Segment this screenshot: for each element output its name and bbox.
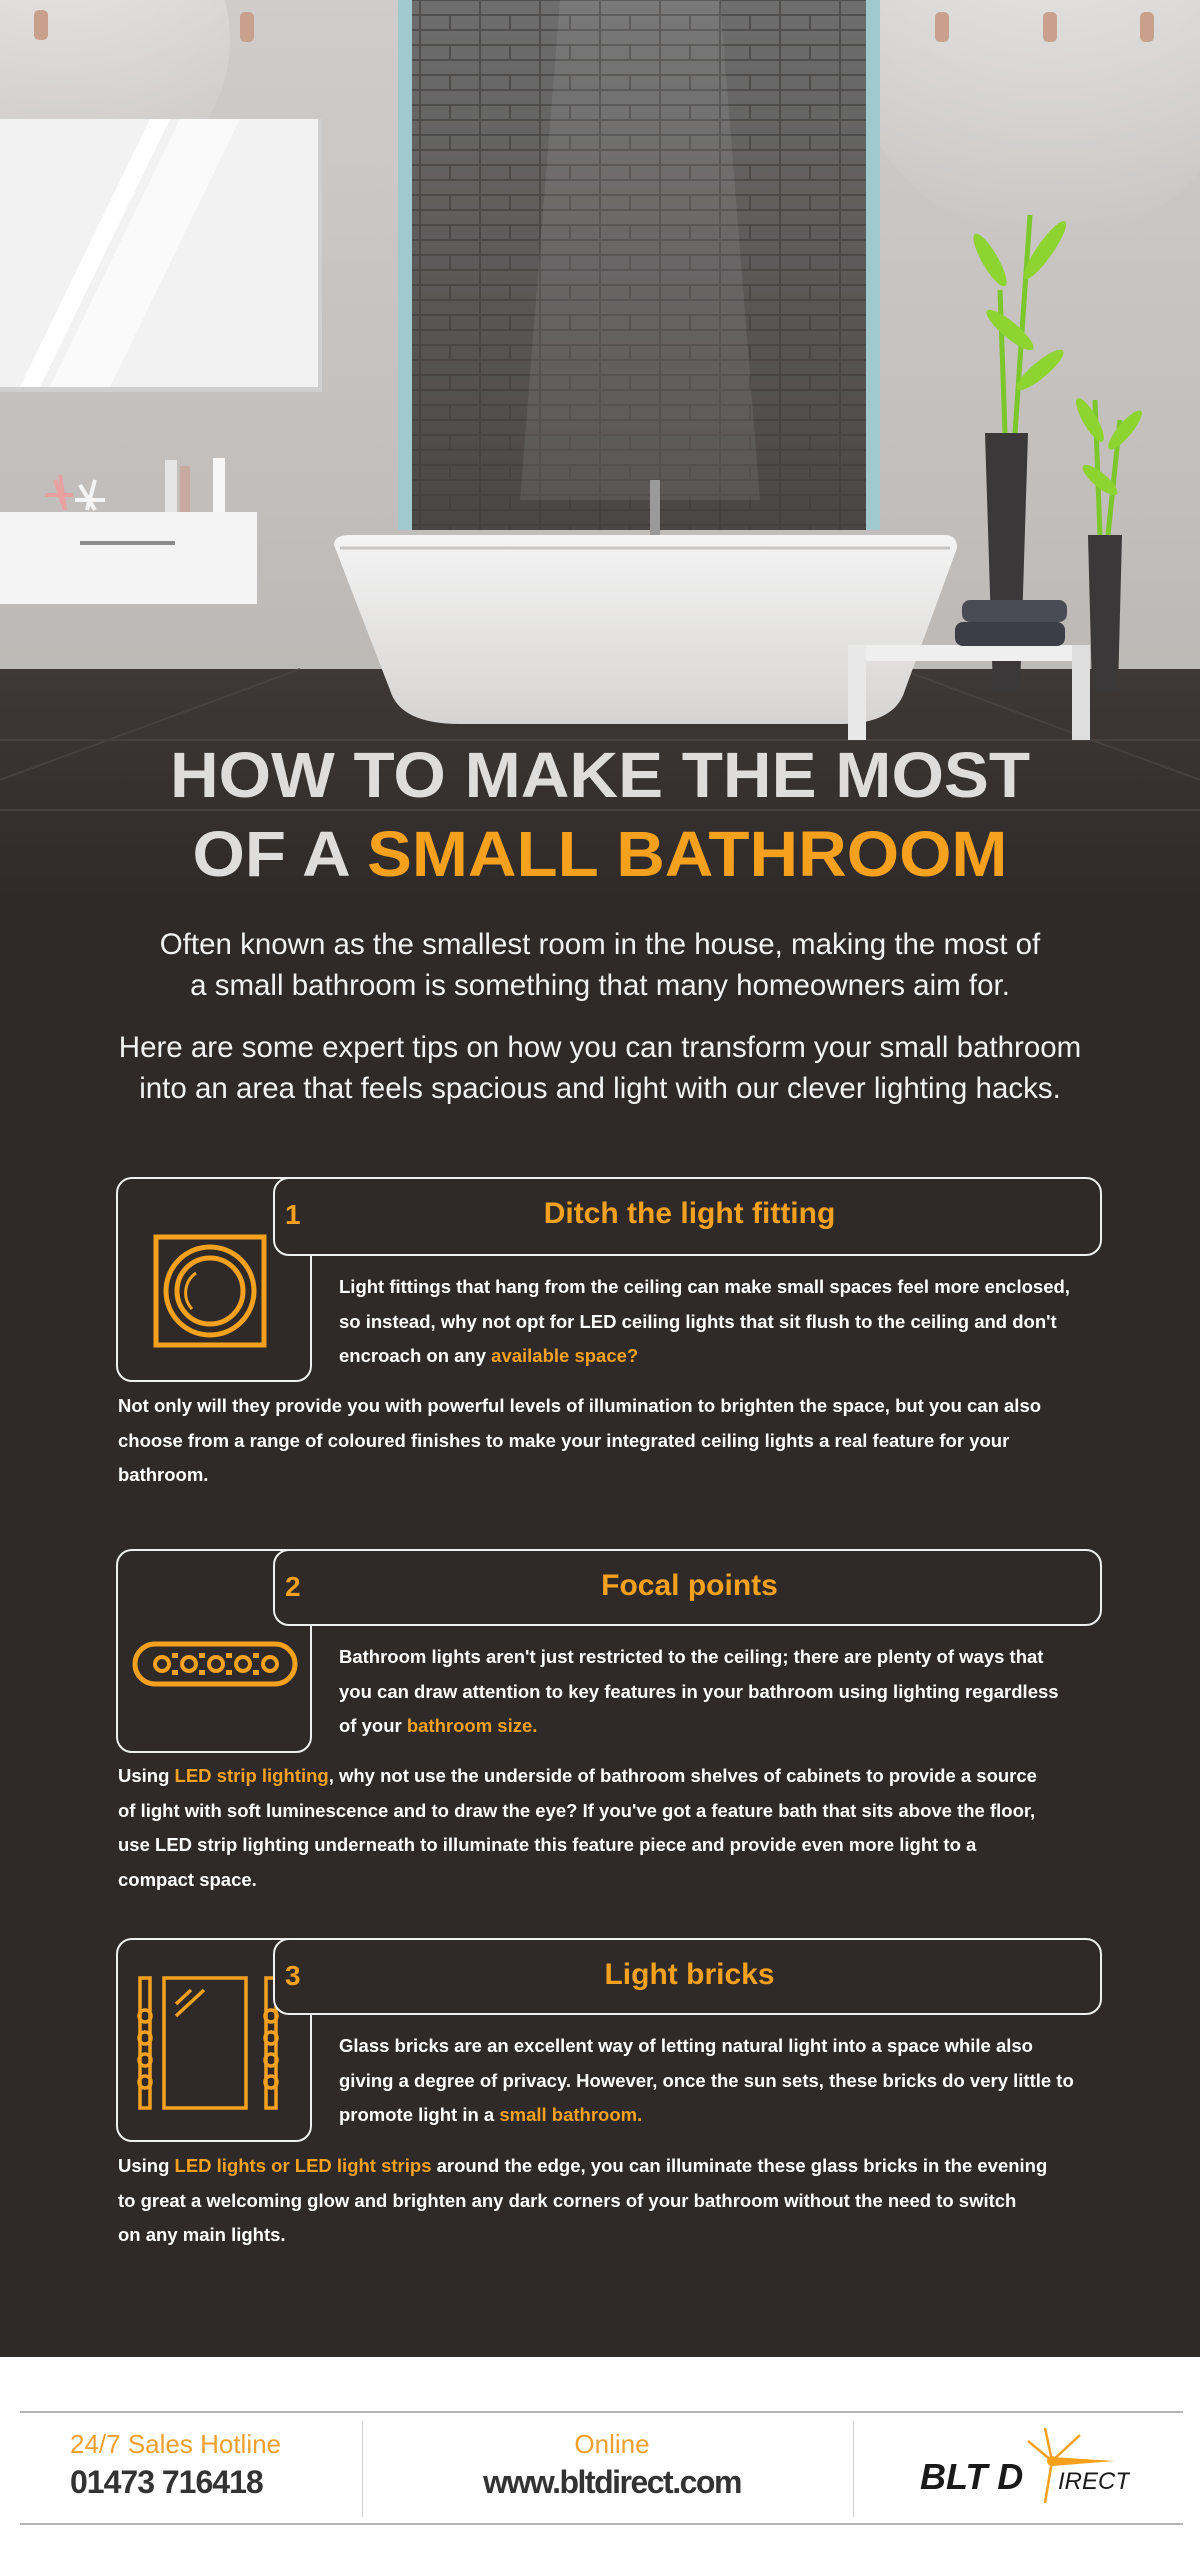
footer: logo <box>920 2428 1130 2504</box>
text 3: giving a degree of privacy. However, once the sun sets, these bricks do very little to <box>339 2070 1074 2090</box>
footer: online: www.bltdirect.com <box>483 2464 741 2500</box>
icon box 3 <box>116 1938 312 2142</box>
icon box 2 <box>116 1549 312 1753</box>
footer: online <box>483 2429 741 2500</box>
heading box 1: Ditch the light fitting <box>544 1197 835 1230</box>
icon box 1 <box>116 1177 312 1382</box>
panel: tip 2 <box>116 1549 1102 1890</box>
icon: LED strip <box>132 1642 298 1686</box>
intro text: Often known as the smallest room in the house, making the most of <box>160 928 1040 961</box>
panel: tip 3 <box>116 1938 1102 2245</box>
heading box 2: Focal points <box>601 1569 778 1602</box>
heading box 2: 2 <box>285 1571 301 1602</box>
heading box 1 <box>273 1177 1102 1256</box>
intro text <box>160 928 1040 1002</box>
bathtub <box>334 480 957 724</box>
text 3 <box>339 2035 1074 2125</box>
spotlights <box>34 10 1154 42</box>
text 1b: choose from a range of coloured finishes to make your integrated ceiling lights a real feature for your <box>118 1430 1009 1450</box>
text 2 <box>339 1646 1059 1736</box>
text 2b <box>118 1765 1037 1890</box>
intro text 2: Here are some expert tips on how you can transform your small bathroom <box>119 1031 1081 1064</box>
brick glass panel <box>398 0 880 530</box>
text 2: you can draw attention to key features in your bathroom using lighting regardless <box>339 1680 1059 1702</box>
text 3b: on any main lights. <box>118 2224 286 2245</box>
text 2b: compact space. <box>118 1868 257 1890</box>
title: OF A SMALL BATHROOM <box>192 818 1008 890</box>
footer: logo: IRECT <box>1058 2468 1130 2495</box>
footer <box>0 2357 1200 2566</box>
text 1: encroach on any available space? <box>339 1345 638 1366</box>
text 1b <box>118 1395 1041 1485</box>
cabinet <box>0 458 257 604</box>
text 1: so instead, why not opt for LED ceiling lights that sit flush to the ceiling and don't <box>339 1310 1057 1332</box>
hero illustration: bathroom <box>0 0 1200 811</box>
heading box 1: 1 <box>285 1199 301 1230</box>
footer: online: Online <box>574 2429 650 2459</box>
title <box>170 739 1030 890</box>
footer: logo: BLT D <box>920 2456 1023 2497</box>
intro text 2: into an area that feels spacious and light with our clever lighting hacks. <box>139 1072 1061 1105</box>
text 1: Light fittings that hang from the ceiling can make small spaces feel more enclosed, <box>339 1276 1070 1297</box>
text 2b: Using LED strip lighting, why not use the underside of bathroom shelves of cabinets to provide a source <box>118 1765 1037 1786</box>
title: HOW TO MAKE THE MOST <box>170 739 1030 811</box>
text 3b: to great a welcoming glow and brighten any dark corners of your bathroom without the need to switch <box>118 2190 1016 2210</box>
floor <box>0 669 1200 900</box>
text 3: Glass bricks are an excellent way of letting natural light into a space while also <box>339 2035 1033 2056</box>
text 2b: use LED strip lighting underneath to illuminate this feature piece and provide even more light to a <box>118 1834 976 1855</box>
text 2: Bathroom lights aren't just restricted to the ceiling; there are plenty of ways that <box>339 1646 1043 1667</box>
icon: ceiling light <box>154 1234 266 1348</box>
text 3b: Using LED lights or LED light strips around the edge, you can illuminate these glass bricks in the evening <box>118 2155 1047 2176</box>
mirror <box>0 119 322 392</box>
intro text 2 <box>119 1031 1081 1105</box>
heading box 3: 3 <box>285 1960 301 1991</box>
text 2b: of light with soft luminescence and to draw the eye? If you've got a feature bath that sits above the floor, <box>118 1800 1035 1820</box>
bench with towels <box>848 600 1090 740</box>
heading box 3: Light bricks <box>604 1958 775 1991</box>
text 1b: bathroom. <box>118 1464 208 1485</box>
footer: hotline <box>70 2429 281 2500</box>
icon: mirror with bulbs <box>137 1976 279 2110</box>
footer: hotline: 24/7 Sales Hotline <box>70 2429 281 2459</box>
panel: tip 1 <box>116 1177 1102 1485</box>
text 1 <box>339 1276 1070 1366</box>
heading box 3 <box>273 1938 1102 2015</box>
footer: hotline: 01473 716418 <box>70 2464 263 2500</box>
text 3b <box>118 2155 1047 2245</box>
plants and vases <box>968 215 1146 690</box>
text 1b: Not only will they provide you with powerful levels of illumination to brighten the space, but you can also <box>118 1395 1041 1416</box>
text 2: of your bathroom size. <box>339 1715 537 1736</box>
heading box 2 <box>273 1549 1102 1626</box>
intro text: a small bathroom is something that many homeowners aim for. <box>190 969 1010 1002</box>
text 3: promote light in a small bathroom. <box>339 2104 642 2125</box>
